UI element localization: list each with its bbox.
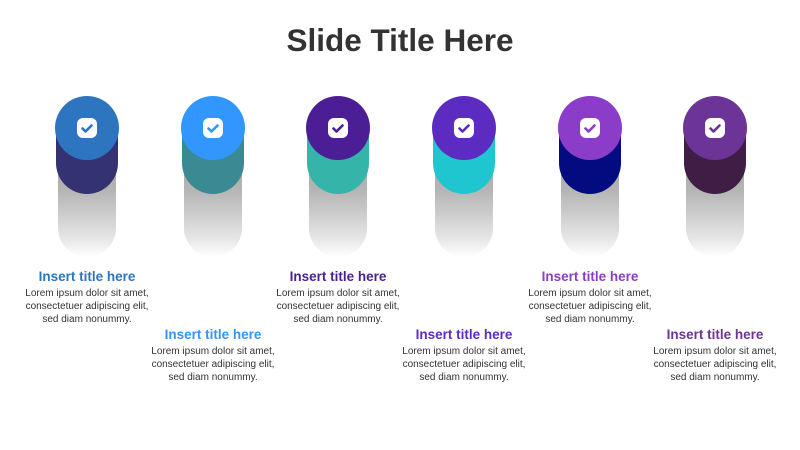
text 5: sed diam nonummy. <box>545 314 635 325</box>
text 1: consectetuer adipiscing elit, <box>26 301 148 312</box>
text 6: consectetuer adipiscing elit, <box>654 359 776 370</box>
text 4: Lorem ipsum dolor sit amet, <box>402 346 526 357</box>
text 6: Lorem ipsum dolor sit amet, <box>653 346 777 357</box>
column 2 <box>181 96 245 251</box>
text 2: Insert title here <box>165 327 261 342</box>
text 2: sed diam nonummy. <box>168 372 258 383</box>
text 6: Insert title here <box>667 327 763 342</box>
text 1: sed diam nonummy. <box>42 314 132 325</box>
column 6 <box>683 96 747 251</box>
text 1 <box>25 269 149 325</box>
text 2 <box>151 327 275 383</box>
text 3 <box>276 269 400 325</box>
text 6 <box>653 327 777 383</box>
column 3 <box>306 96 370 251</box>
title: Slide Title Here <box>286 22 514 58</box>
text 1: Lorem ipsum dolor sit amet, <box>25 288 149 299</box>
text 1: Insert title here <box>39 269 135 284</box>
text 3: Insert title here <box>290 269 386 284</box>
text 4 <box>402 327 526 383</box>
text 5: Insert title here <box>542 269 638 284</box>
text 2: Lorem ipsum dolor sit amet, <box>151 346 275 357</box>
column 5 <box>558 96 622 251</box>
column 1 <box>55 96 119 251</box>
text 5: consectetuer adipiscing elit, <box>529 301 651 312</box>
text 4: consectetuer adipiscing elit, <box>403 359 525 370</box>
text 3: sed diam nonummy. <box>293 314 383 325</box>
column 4 <box>432 96 496 251</box>
text 4: Insert title here <box>416 327 512 342</box>
text 3: consectetuer adipiscing elit, <box>277 301 399 312</box>
text 3: Lorem ipsum dolor sit amet, <box>276 288 400 299</box>
text 5 <box>528 269 652 325</box>
text 6: sed diam nonummy. <box>670 372 760 383</box>
text 4: sed diam nonummy. <box>419 372 509 383</box>
text 5: Lorem ipsum dolor sit amet, <box>528 288 652 299</box>
text 2: consectetuer adipiscing elit, <box>152 359 274 370</box>
